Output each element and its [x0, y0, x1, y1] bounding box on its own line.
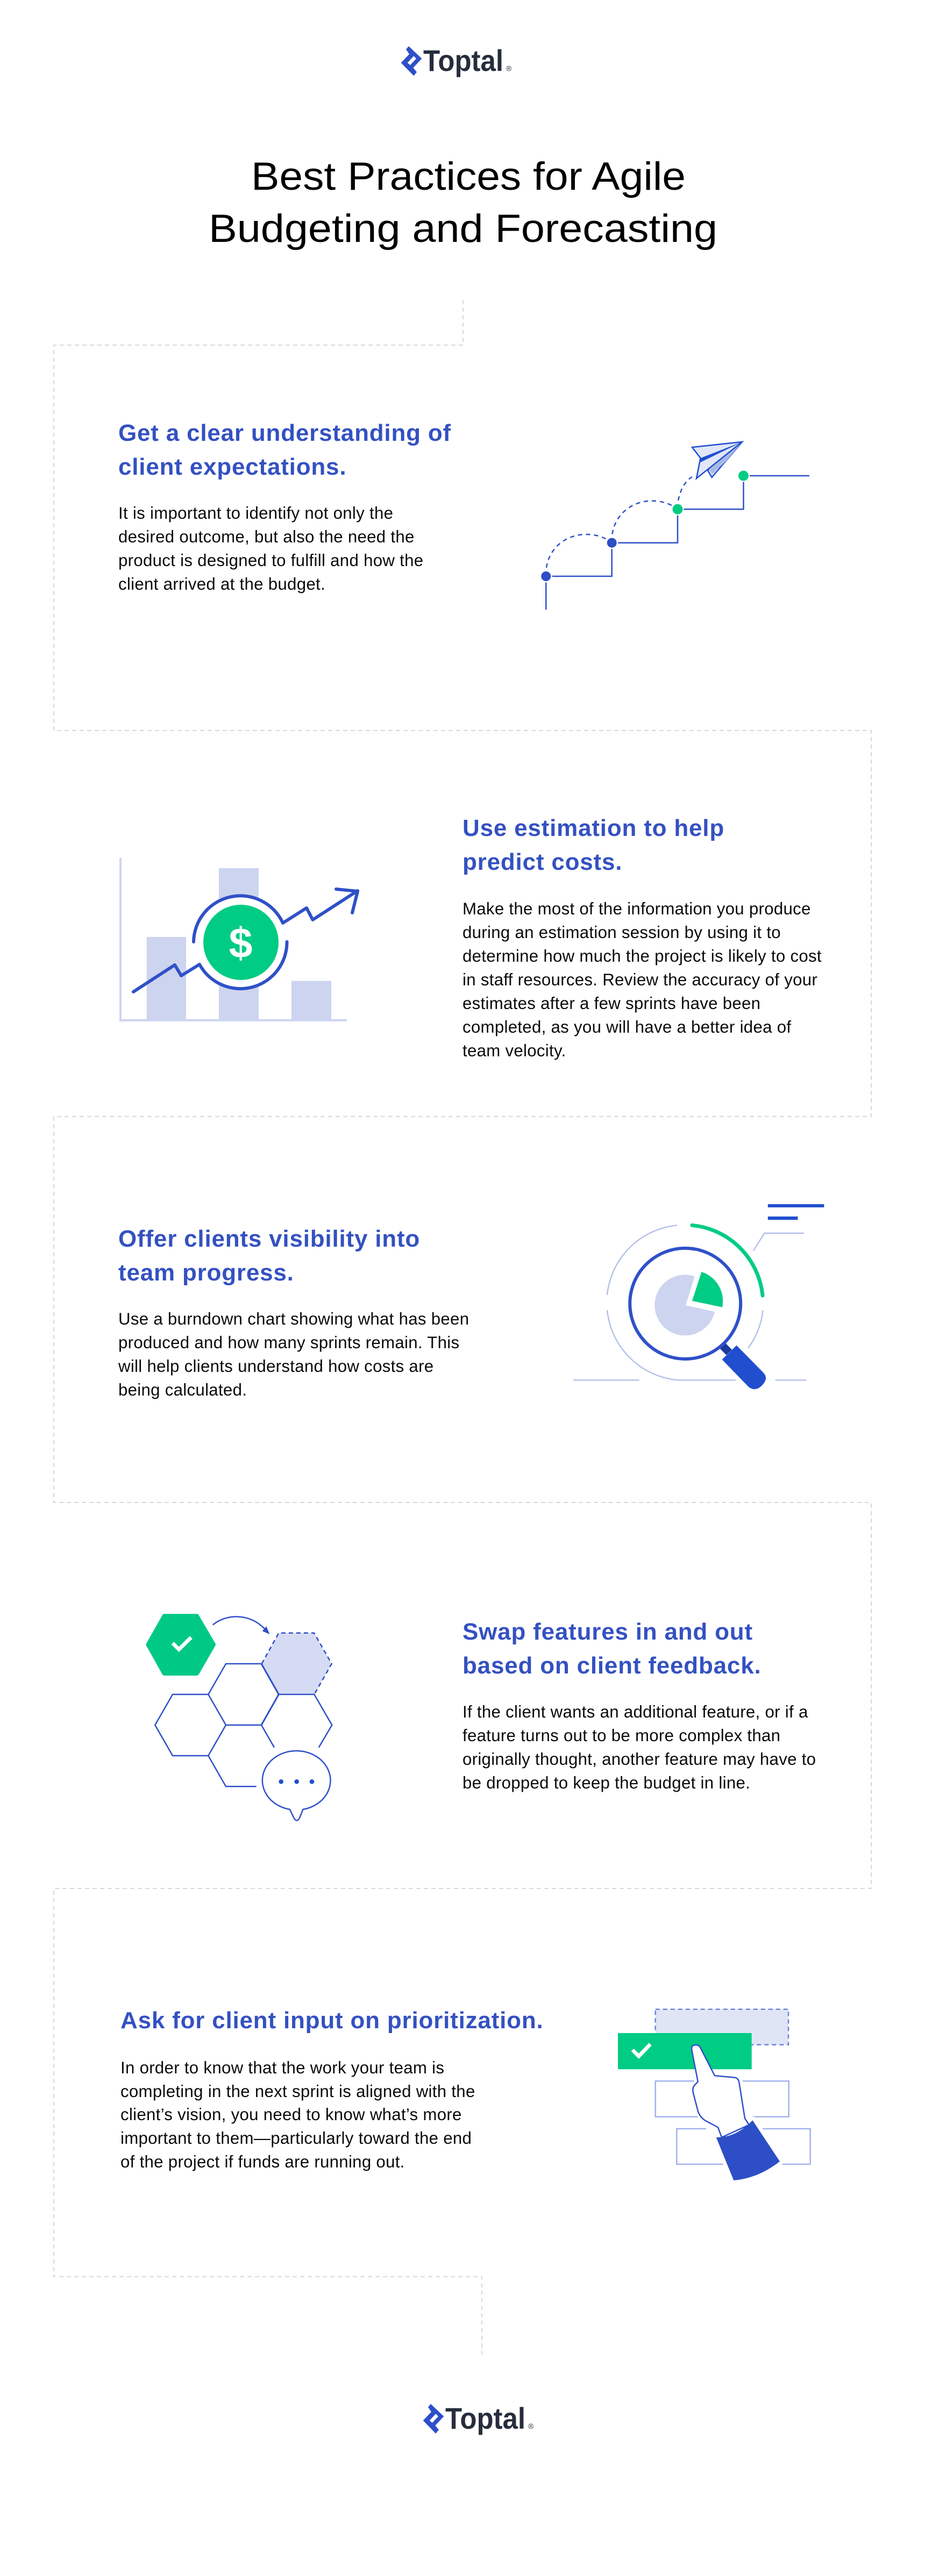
icon: green hexagon with check — [148, 1616, 214, 1673]
heading: Swap features in and out — [462, 1619, 753, 1645]
text block: produced and how many sprints remain. This — [118, 1333, 459, 1352]
text block: will help clients understand how costs are — [118, 1357, 433, 1376]
heading: predict costs. — [462, 849, 622, 875]
text block: of the project if funds are running out. — [120, 2152, 405, 2171]
heading — [118, 420, 451, 480]
title — [209, 155, 717, 251]
heading — [462, 1619, 762, 1679]
text block: If the client wants an additional feature, or if a — [462, 1702, 808, 1721]
title: Budgeting and Forecasting — [209, 207, 717, 251]
text block: client’s vision, you need to know what’s more — [120, 2105, 462, 2124]
icon: speech bubble — [262, 1751, 330, 1820]
panel: estimation — [120, 815, 822, 1060]
heading: Use estimation to help — [462, 815, 724, 841]
panel: prioritization — [120, 2007, 810, 2180]
chart: bars with rising arrow and coin: $ — [229, 919, 252, 967]
text block: It is important to identify not only the — [118, 504, 393, 523]
text block: completing in the next sprint is aligned with the — [120, 2082, 475, 2101]
icon: magnifier over pie chart — [573, 1204, 824, 1389]
text block: being calculated. — [118, 1380, 247, 1399]
text block: Make the most of the information you produce — [462, 899, 811, 918]
text block: In order to know that the work your team is — [120, 2058, 444, 2077]
text block: important to them—particularly toward the end — [120, 2129, 472, 2148]
title: Best Practices for Agile — [251, 155, 686, 198]
icon: hexagons with speech bubble — [148, 1616, 332, 1820]
heading: client expectations. — [118, 454, 346, 480]
text block: be dropped to keep the budget in line. — [462, 1773, 750, 1792]
heading: Ask for client input on prioritization. — [120, 2007, 544, 2034]
chart: bars with rising arrow and coin — [120, 858, 358, 1020]
heading: team progress. — [118, 1260, 294, 1286]
logo: Toptal top: ® — [506, 64, 512, 73]
text block: feature turns out to be more complex than — [462, 1726, 780, 1745]
heading — [462, 815, 724, 875]
panel: swap features — [148, 1616, 816, 1820]
text block: completed, as you will have a better idea of — [462, 1018, 791, 1036]
heading: Get a clear understanding of — [118, 420, 451, 446]
logo: Toptal top: Toptal — [423, 44, 503, 77]
heading — [118, 1226, 420, 1286]
logo: Toptal bottom: Toptal — [445, 2401, 525, 2435]
icon: hand selecting list item — [618, 2009, 810, 2180]
heading: based on client feedback. — [462, 1652, 762, 1679]
text block: team velocity. — [462, 1041, 566, 1060]
icon: stairs with paper plane — [540, 442, 809, 610]
panel: client expectations — [118, 420, 809, 610]
arrow — [213, 1616, 269, 1634]
heading: Offer clients visibility into — [118, 1226, 420, 1252]
text block: during an estimation session by using it to — [462, 923, 781, 942]
text block: in staff resources. Review the accuracy of your — [462, 970, 817, 989]
text block — [462, 899, 822, 1060]
text block — [462, 1702, 816, 1792]
text block: determine how much the project is likely to cost — [462, 947, 822, 965]
panel: visibility — [118, 1204, 824, 1399]
logo: Toptal bottom: ® — [528, 2422, 534, 2430]
text block — [118, 504, 423, 593]
text block: client arrived at the budget. — [118, 575, 325, 593]
text block: desired outcome, but also the need the — [118, 527, 415, 546]
text block — [118, 1310, 469, 1399]
text block — [120, 2058, 475, 2171]
text block: estimates after a few sprints have been — [462, 994, 760, 1013]
text block: originally thought, another feature may have to — [462, 1750, 816, 1769]
text block: Use a burndown chart showing what has been — [118, 1310, 469, 1328]
text block: product is designed to fulfill and how the — [118, 551, 423, 570]
